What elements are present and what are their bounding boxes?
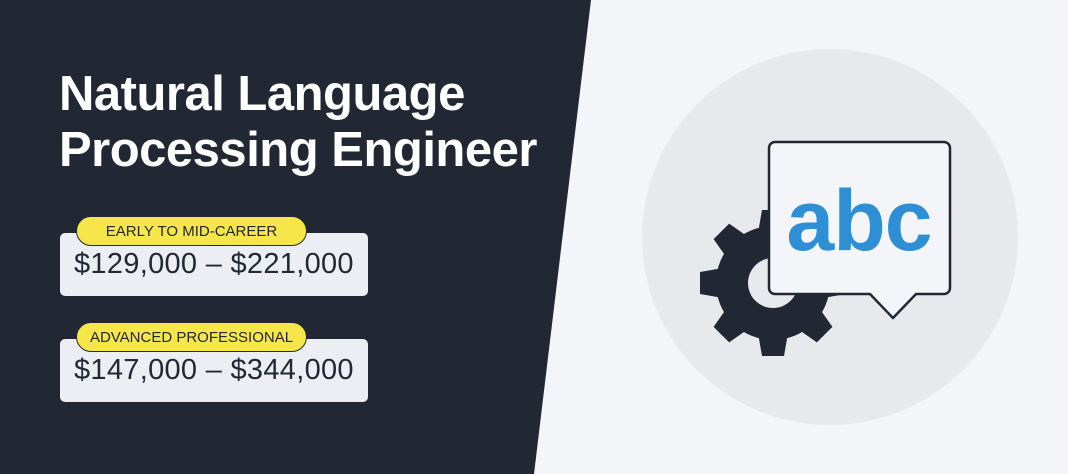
card: early to mid-career bbox=[60, 233, 368, 296]
pill: advanced professional bbox=[76, 322, 307, 352]
title bbox=[59, 67, 537, 177]
pill: early to mid-career bbox=[76, 216, 307, 246]
icon: speech bubble bbox=[769, 142, 950, 318]
pill: early to mid-career: EARLY TO MID-CAREER bbox=[106, 223, 277, 240]
icon: gear bbox=[700, 210, 846, 356]
card: advanced professional bbox=[60, 339, 368, 402]
title: Processing Engineer bbox=[59, 123, 537, 177]
icon: speech bubble: abc bbox=[786, 173, 932, 269]
illustration bbox=[642, 49, 1018, 425]
title: Natural Language bbox=[59, 67, 465, 121]
card: early to mid-career: $129,000 – $221,000 bbox=[74, 248, 354, 280]
card: advanced professional: $147,000 – $344,000 bbox=[74, 354, 354, 386]
pill: advanced professional: ADVANCED PROFESSIONAL bbox=[90, 329, 293, 346]
background circle bbox=[642, 49, 1018, 425]
